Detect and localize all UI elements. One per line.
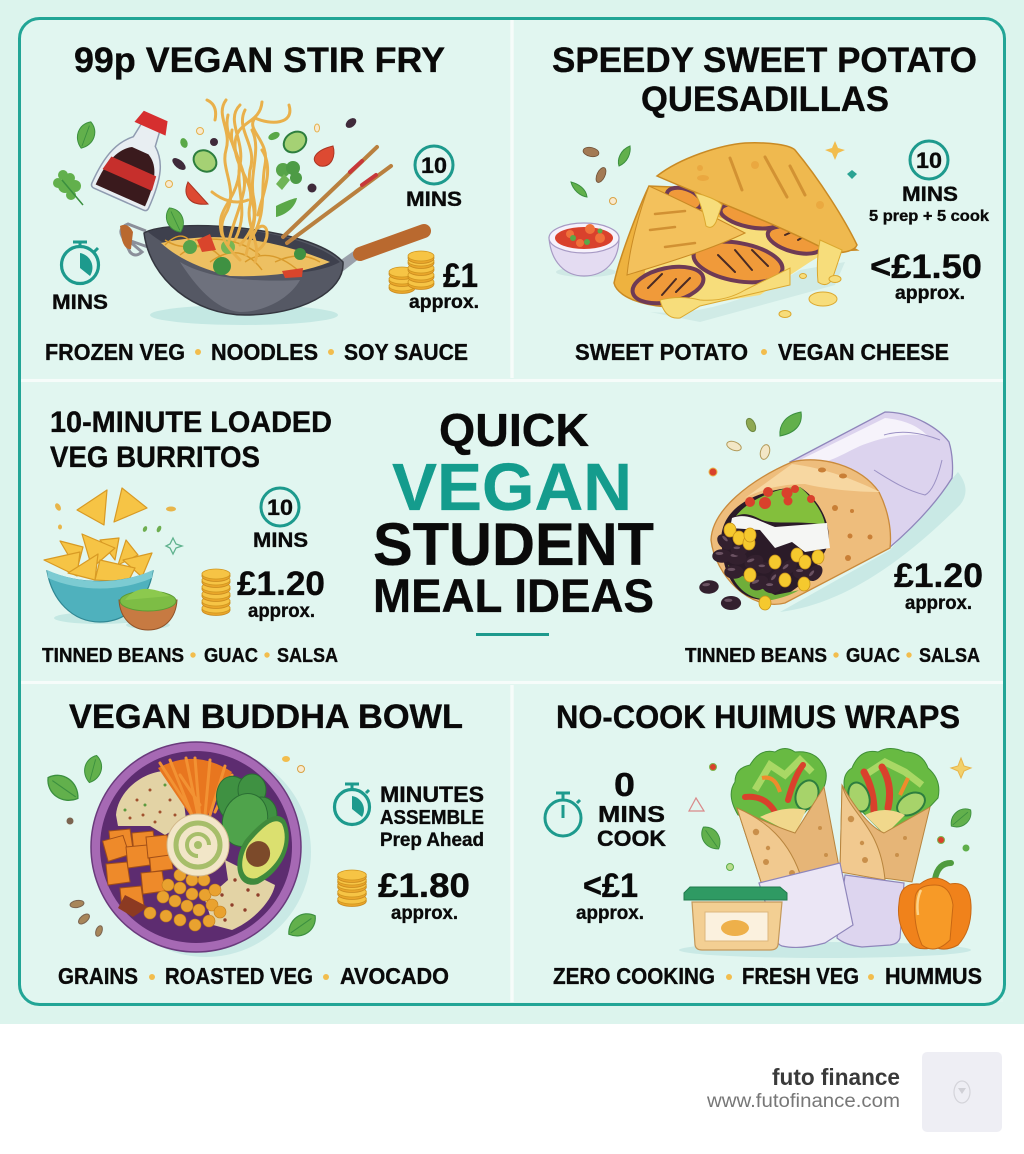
stat: 10 mins with breakdown [869, 141, 989, 225]
heading: quesadillas: SPEEDY SWEET POTATO [552, 41, 977, 80]
ingredients row: GUAC [846, 645, 900, 667]
icon: stopwatch [334, 784, 370, 824]
stat: zero mins cook: 0 [614, 766, 635, 803]
sweet potato slices [629, 183, 825, 309]
ingredients row [553, 963, 982, 989]
bowl carrots [158, 759, 232, 820]
ingredients row: NOODLES [211, 339, 318, 365]
stat: 10 mins: MINS [406, 188, 462, 211]
upper tortilla [657, 143, 857, 253]
stat: price with coins: approx. [409, 292, 479, 313]
stat: price with coins: approx. [391, 903, 458, 924]
ingredients row [42, 645, 338, 667]
bowl grains [116, 771, 186, 835]
illustration: salsa bowl [549, 223, 619, 277]
illustration: wok with noodles [120, 100, 424, 325]
icon: orange pepper [898, 863, 971, 949]
main title: MEAL IDEAS [373, 569, 654, 622]
melted cheese [660, 193, 842, 318]
illustration: hummus wraps [679, 748, 975, 958]
ingredients row [58, 963, 449, 989]
panel: 99p vegan stir fry [21, 20, 510, 378]
heading: burritos: VEG BURRITOS [50, 441, 260, 474]
icon: hummus tub [684, 887, 787, 950]
bowl sweet potato [102, 829, 173, 917]
stat: time left: MINS [52, 291, 108, 314]
panel: no-cook hummus wraps [514, 685, 1003, 1002]
ingredients row: GUAC [204, 645, 258, 667]
stat: price with coins [389, 251, 479, 313]
brand text: www.futofinance.com [706, 1091, 900, 1112]
illustration: quesadilla [614, 143, 857, 322]
stat: price with coins: £1.20 [237, 565, 325, 603]
ingredients row: FROZEN VEG [45, 339, 185, 365]
brand logo tile [922, 1052, 1002, 1132]
stat: zero mins cook: MINS [598, 801, 665, 827]
ingredients row: GRAINS [58, 963, 138, 989]
stat: 10 mins: 10 [421, 153, 447, 178]
bowl chickpeas [144, 869, 226, 931]
illustration: nachos and guacamole [44, 488, 182, 630]
stat: time left [52, 242, 108, 314]
panel: vegan buddha bowl [21, 685, 510, 1002]
panel: sweet potato quesadillas [514, 20, 1003, 378]
stat: price with coins [338, 867, 470, 924]
icon: coins [202, 569, 230, 616]
stat: price with coins: approx. [248, 601, 315, 622]
stat: price: approx. [576, 903, 644, 924]
stat: zero mins cook [545, 766, 666, 851]
heading: buddha bowl: VEGAN BUDDHA BOWL [69, 698, 463, 736]
lower tortilla flap [627, 186, 745, 275]
ingredients row: ZERO COOKING [553, 963, 715, 989]
ingredients row [685, 645, 980, 667]
stat: 10 mins with breakdown: 10 [916, 148, 942, 173]
stat: 10 mins [406, 146, 462, 211]
heading: burritos: 10-MINUTE LOADED [50, 406, 332, 439]
ingredients row: SALSA [919, 645, 980, 667]
bowl spinach [211, 772, 277, 853]
main title: STUDENT [373, 511, 654, 578]
icon: coins [338, 870, 366, 906]
stat: 10 mins with breakdown: MINS [902, 183, 958, 206]
bowl avocado [237, 816, 289, 885]
right wrap [840, 748, 939, 882]
stat: zero mins cook: COOK [597, 826, 666, 851]
ingredients row: HUMMUS [885, 963, 982, 989]
illustration: burrito [699, 412, 966, 612]
ingredients row [45, 339, 468, 365]
ingredients row: ROASTED VEG [165, 963, 313, 989]
stat: price [576, 867, 644, 924]
ingredients row: AVOCADO [340, 963, 449, 989]
icon: coins [389, 251, 434, 294]
stat: minutes assemble: ASSEMBLE [380, 807, 484, 829]
stat: price [870, 248, 982, 304]
wrap paper [759, 863, 904, 947]
stat: 10 mins with breakdown: 5 prep + 5 cook [869, 208, 989, 225]
ingredients row: SWEET POTATO [575, 339, 748, 365]
ingredients row: FRESH VEG [742, 963, 859, 989]
ingredients row: SALSA [277, 645, 338, 667]
illustration: buddha bowl [42, 742, 321, 957]
vegetables flying [53, 116, 358, 235]
ingredients row: TINNED BEANS [685, 645, 827, 667]
left wrap [731, 748, 840, 885]
brand text [706, 1064, 900, 1112]
main title [373, 404, 654, 636]
heading: quesadillas [552, 41, 977, 119]
panel: loaded veg burritos and main title [21, 383, 1003, 680]
ingredients row: TINNED BEANS [42, 645, 184, 667]
brand text: futo finance [772, 1064, 900, 1090]
white footer strip [0, 1024, 1024, 1154]
icon: soy sauce bottle [90, 103, 184, 212]
stat: price [894, 557, 983, 614]
stat: price with coins: £1.80 [378, 867, 470, 905]
burrito filling [712, 485, 830, 600]
heading: burritos [50, 406, 332, 474]
ingredients row [575, 339, 949, 365]
ingredients row: VEGAN CHEESE [778, 339, 949, 365]
decorative garnish [571, 141, 857, 204]
stat: minutes assemble [334, 782, 484, 851]
stat: minutes assemble: Prep Ahead [380, 830, 484, 851]
icon: stopwatch outline [545, 793, 581, 836]
stat: price with coins [202, 565, 325, 622]
stat: 10 mins: 10 [267, 495, 293, 520]
heading: stir fry: 99p VEGAN STIR FRY [74, 41, 445, 80]
heading: quesadillas: QUESADILLAS [641, 80, 889, 119]
heading: wraps: NO-COOK HUIMUS WRAPS [556, 699, 960, 735]
stat: price: <£1 [583, 867, 638, 905]
stat: price: approx. [905, 593, 972, 614]
stat: price: approx. [895, 283, 965, 304]
stat: price: <£1.50 [870, 248, 982, 286]
stat: price: £1.20 [894, 557, 983, 595]
main title: VEGAN [392, 450, 632, 525]
stat: price with coins: £1 [443, 257, 478, 295]
icon: stopwatch [62, 242, 98, 284]
main title: QUICK [439, 404, 589, 456]
stat: 10 mins: MINS [253, 529, 308, 552]
stat: 10 mins [253, 488, 308, 552]
ingredients row: SOY SAUCE [344, 339, 468, 365]
chopsticks [283, 147, 391, 243]
bowl hummus swirl [167, 814, 229, 876]
stat: minutes assemble: MINUTES [380, 782, 484, 807]
